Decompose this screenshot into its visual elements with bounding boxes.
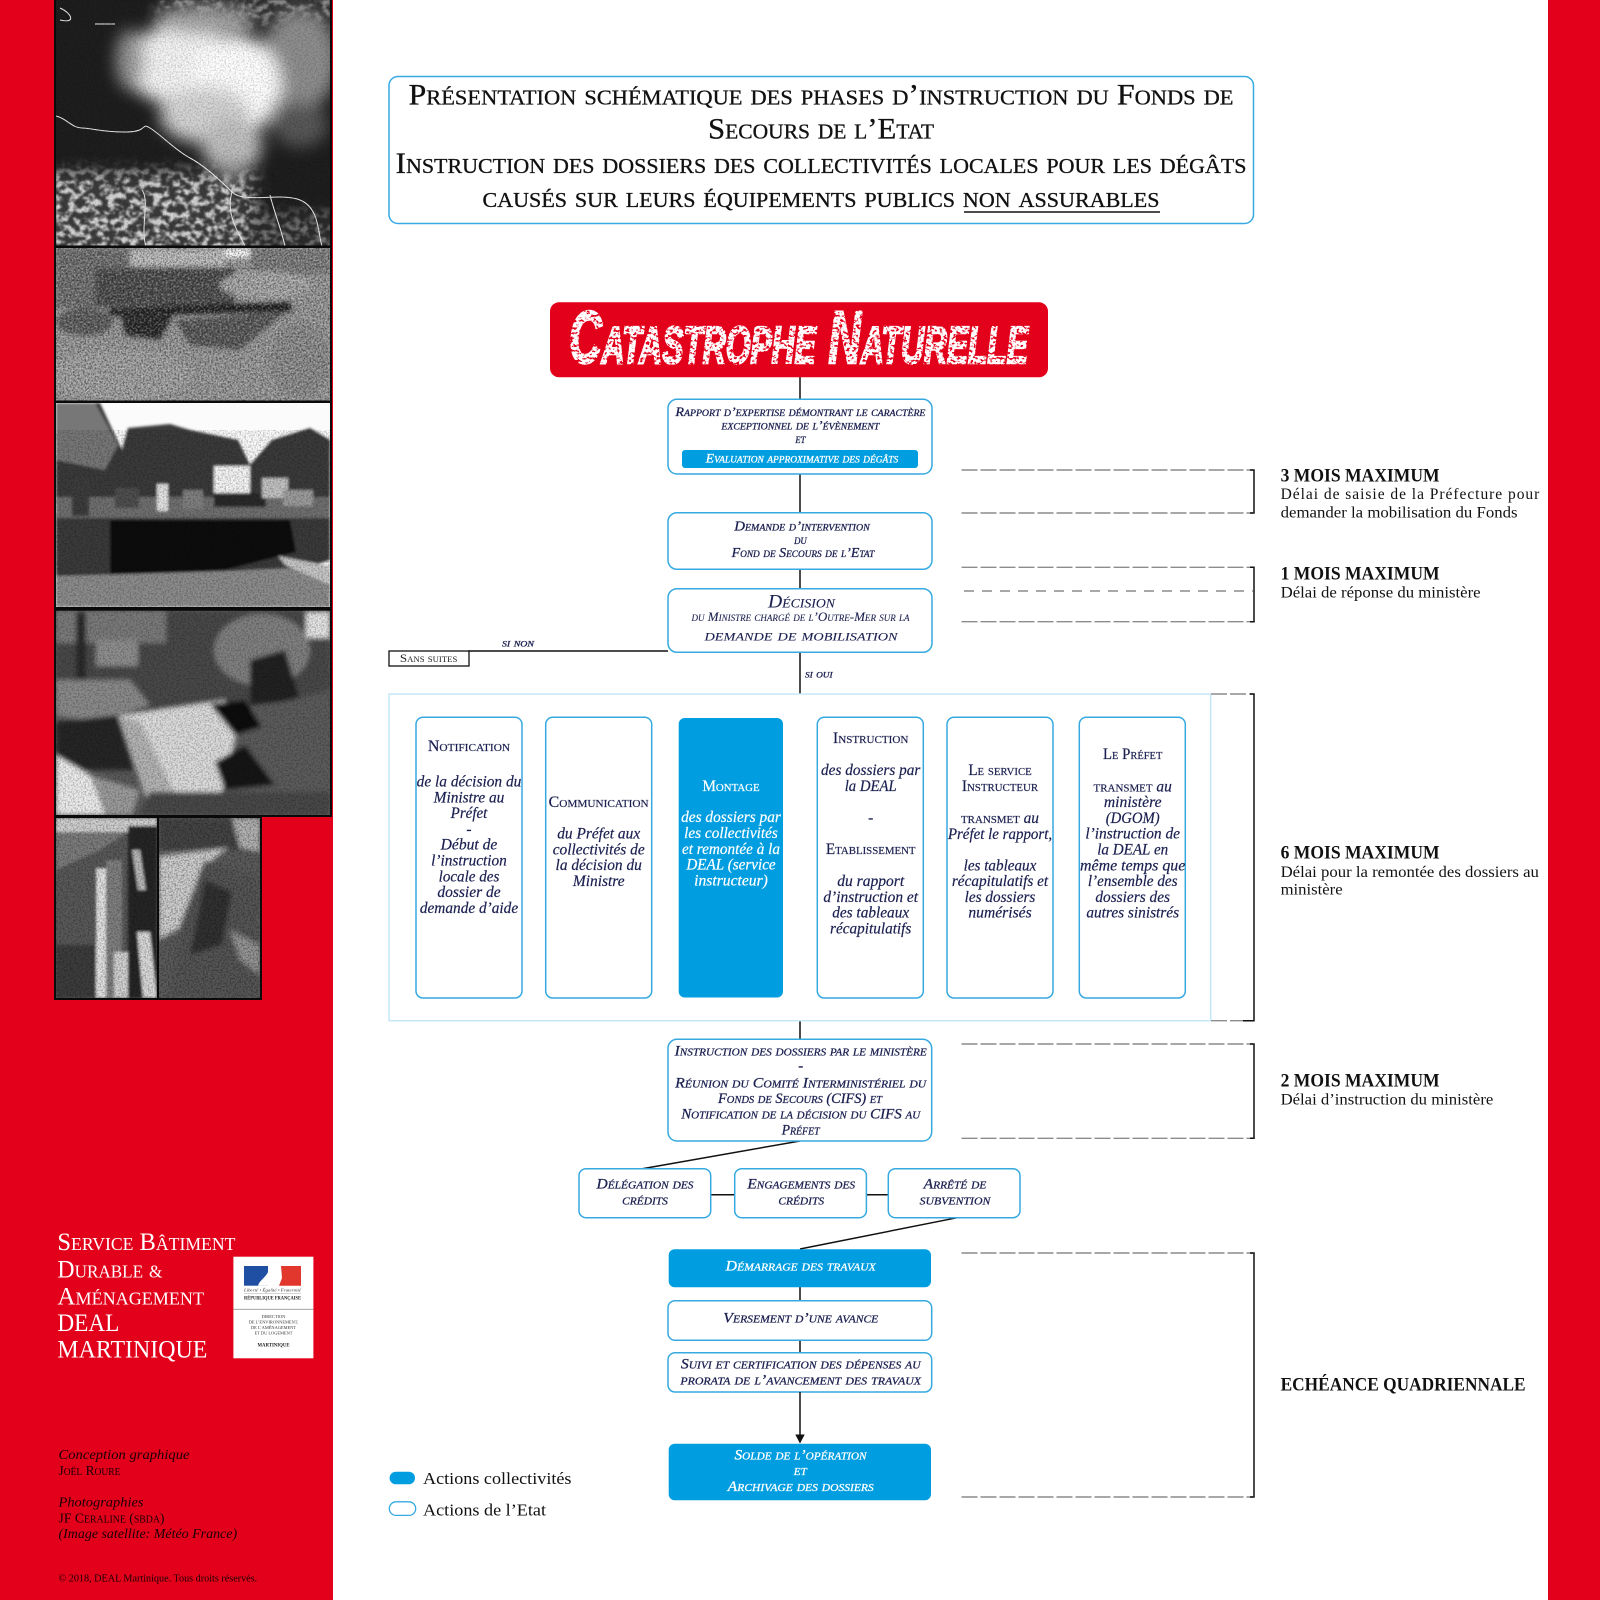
box: demande d'intervention: Fond de Secours de l’Etat <box>731 545 875 560</box>
card: montage: et remontée à la <box>682 841 780 858</box>
card: service instructeur: Préfet le rapport, <box>947 826 1052 843</box>
card: communication: Communication <box>549 794 649 811</box>
card: instruction: - <box>868 809 873 826</box>
credits: Photographies <box>57 1496 144 1511</box>
service heading: Durable & <box>57 1256 162 1283</box>
card: service instructeur: les dossiers <box>965 889 1035 906</box>
bracket: 3 mois <box>962 470 1254 513</box>
box: versement d'une avance <box>668 1301 932 1340</box>
box: versement d'une avance: Versement d’une avance <box>723 1311 879 1327</box>
card: montage: des dossiers par <box>681 809 782 826</box>
box: engagements des crédits <box>735 1169 866 1218</box>
logo: République Française DEAL: ET DU LOGEMENT <box>255 1330 293 1336</box>
box: engagements des crédits: crédits <box>778 1193 825 1209</box>
credits: © 2018, DEAL Martinique. Tous droits réservés. <box>58 1573 257 1584</box>
box: instruction par le ministère: - <box>798 1059 803 1075</box>
box: délégation des crédits: crédits <box>622 1193 668 1209</box>
card: notification: demande d’aide <box>420 900 518 917</box>
service heading: DEAL <box>57 1310 119 1337</box>
box: rapport d'expertise: exceptionnel de l’évènement <box>720 418 880 433</box>
card: le préfet: transmet au <box>1094 778 1172 795</box>
label: si non: si non <box>502 638 535 650</box>
photo: satellite image of the cyclone <box>56 0 338 246</box>
card: communication: collectivités de <box>553 841 645 858</box>
note: 1 mois maximum: 1 MOIS MAXIMUM <box>1281 565 1440 585</box>
credits: Joël Roure <box>58 1464 120 1479</box>
logo: République Française DEAL: Liberté • Égalité • Fraternité <box>243 1288 302 1292</box>
box: démarrage des travaux <box>669 1249 931 1287</box>
note: 3 mois maximum: Délai de saisie de la Préfecture pour <box>1281 486 1540 503</box>
card: notification: Notification <box>428 738 510 755</box>
title box: Secours de l’Etat <box>708 112 934 145</box>
connector lines <box>468 377 957 1353</box>
card: service instructeur: Le service <box>968 762 1032 779</box>
logo: République Française DEAL: DIRECTION <box>262 1314 286 1319</box>
box: solde de l'opération: Solde de l’opération <box>734 1448 867 1464</box>
logo: République Française DEAL: DE L’AMÉNAGEMENT <box>251 1325 296 1330</box>
box: rapport d'expertise <box>668 399 932 474</box>
photo: collapsed hillside and house <box>50 248 330 401</box>
note: 6 mois maximum: 6 MOIS MAXIMUM <box>1281 844 1440 864</box>
card: notification: dossier de <box>437 884 501 901</box>
note: 6 mois maximum: Délai pour la remontée des dossiers au <box>1281 864 1539 881</box>
box: instruction par le ministère: Instruction des dossiers par le ministère <box>674 1044 927 1060</box>
logo: République Française DEAL: RÉPUBLIQUE FRANÇAISE <box>244 1294 301 1302</box>
box: suivi et certification: Suivi et certification des dépenses au <box>681 1357 922 1373</box>
note: 1 mois maximum <box>1281 565 1481 602</box>
photo column <box>50 0 338 1000</box>
title box: Présentation schématique des phases d’instruction du Fonds de <box>408 79 1234 112</box>
note: 3 mois maximum: 3 MOIS MAXIMUM <box>1281 467 1440 487</box>
box: décision du ministre: Décision <box>767 592 836 612</box>
card: service instructeur: récapitulatifs et <box>952 873 1049 890</box>
note: 3 mois maximum: demander la mobilisation du Fonds <box>1281 504 1518 522</box>
bracket: 6 mois <box>1211 694 1254 1021</box>
card: notification: l’instruction <box>431 852 507 869</box>
box: rapport d'expertise: Evaluation approximative des dégâts <box>705 450 899 465</box>
card: notification <box>416 717 522 998</box>
card: montage: Montage <box>702 778 760 795</box>
photo: road collapse with truck <box>56 403 330 607</box>
card: notification: de la décision du <box>417 773 522 790</box>
card: service instructeur: numérisés <box>968 904 1032 921</box>
box: arrêté de subvention: subvention <box>920 1193 991 1209</box>
card: service instructeur: les tableaux <box>964 857 1036 874</box>
banner: Catastrophe Naturelle: Catastrophe Naturelle <box>569 296 1029 379</box>
title box: causés sur leurs équipements publics non assurables <box>482 181 1160 214</box>
box: solde de l'opération <box>669 1444 931 1500</box>
card: communication <box>546 717 652 998</box>
legend: Actions de l’Etat <box>423 1500 546 1519</box>
bracket: 1 mois <box>962 567 1254 622</box>
box: délégation des crédits <box>579 1169 711 1218</box>
panel: right red band <box>1548 0 1600 1600</box>
bracket: 2 mois <box>962 1044 1254 1138</box>
photo: eroded bank beside a road <box>159 818 260 998</box>
label: si oui: si oui <box>805 668 833 680</box>
card: instruction <box>817 717 923 998</box>
card: service instructeur <box>947 717 1053 998</box>
box: solde de l'opération: Archivage des dossiers <box>727 1479 874 1495</box>
box: instruction par le ministère: Notification de la décision du CIFS au <box>680 1107 921 1123</box>
box: demande d'intervention: Demande d’intervention <box>733 518 871 534</box>
arrow: vers le solde <box>795 1392 805 1444</box>
box: suivi et certification: prorata de l’avancement des travaux <box>679 1372 922 1388</box>
title box <box>389 76 1254 224</box>
box: délégation des crédits: Délégation des <box>595 1177 694 1193</box>
card: instruction: la DEAL <box>845 778 897 795</box>
logo: République Française DEAL <box>233 1257 313 1358</box>
credits: Conception graphique <box>58 1448 190 1463</box>
banner: Catastrophe Naturelle <box>550 296 1048 379</box>
card: service instructeur: Instructeur <box>962 778 1039 795</box>
box: sans suites: Sans suites <box>400 651 457 665</box>
card: le préfet <box>1079 717 1185 998</box>
box: instruction par le ministère <box>668 1039 932 1141</box>
note: 6 mois maximum <box>1281 844 1539 899</box>
service heading: MARTINIQUE <box>57 1337 207 1364</box>
card: le préfet: dossiers des <box>1095 889 1170 906</box>
card: communication: la décision du <box>556 857 642 874</box>
card: notification: Préfet <box>450 805 488 822</box>
card: instruction: des dossiers par <box>821 762 921 779</box>
legend <box>389 1469 572 1519</box>
box: demande d'intervention: du <box>793 532 807 547</box>
panel: left red sidebar <box>0 0 333 1600</box>
card: instruction: Instruction <box>833 730 908 747</box>
card: le préfet: l’ensemble des <box>1088 873 1178 890</box>
box: instruction par le ministère: Réunion du Comité Interministériel du <box>674 1075 927 1091</box>
note: 3 mois maximum <box>1281 467 1540 522</box>
card: instruction: du rapport <box>837 873 905 890</box>
card: le préfet: la DEAL en <box>1097 841 1168 858</box>
box: demande d'intervention <box>668 513 932 569</box>
card: service instructeur: transmet au <box>961 810 1039 827</box>
card: le préfet: (DGOM) <box>1106 810 1160 827</box>
box: engagements des crédits: Engagements des <box>746 1177 856 1193</box>
card: notification: - <box>466 821 472 838</box>
card: notification: locale des <box>439 868 499 885</box>
note: 6 mois maximum: ministère <box>1281 882 1343 899</box>
card: montage: DEAL (service <box>685 856 776 873</box>
credits: JF Ceraline (sbda) <box>58 1511 165 1526</box>
bracket: échéance quadriennale <box>962 1253 1254 1497</box>
box: instruction par le ministère: Préfet <box>781 1123 820 1139</box>
card: le préfet: autres sinistrés <box>1086 904 1179 921</box>
card: instruction: des tableaux <box>832 904 909 921</box>
box: décision du ministre: du Ministre chargé de l’Outre-Mer sur la <box>690 609 910 624</box>
service heading <box>57 1229 235 1364</box>
card: communication: Ministre <box>572 873 625 890</box>
service heading: Aménagement <box>57 1283 204 1310</box>
box: rapport d'expertise: Rapport d’expertise démontrant le caractère <box>674 404 926 419</box>
box: solde de l'opération: et <box>793 1463 808 1479</box>
legend: Actions collectivités <box>423 1469 572 1488</box>
card: montage <box>679 718 783 998</box>
title box: Instruction des dossiers des collectivités locales pour les dégâts <box>396 147 1246 180</box>
box: arrêté de subvention: Arrêté de <box>923 1177 987 1193</box>
note: 2 mois maximum: Délai d’instruction du ministère <box>1281 1092 1493 1108</box>
card: montage: les collectivités <box>684 825 778 842</box>
note: 2 mois maximum <box>1281 1071 1493 1108</box>
logo: République Française DEAL: DE L’ENVIRONNEMENT, <box>249 1320 298 1326</box>
photo: torrent cutting the road <box>56 611 330 815</box>
photo: damaged seaside road barrier <box>56 818 157 998</box>
card: notification: Début de <box>440 837 497 854</box>
panel: phases locales <box>389 694 1211 1021</box>
note: 1 mois maximum: Délai de réponse du ministère <box>1281 584 1481 602</box>
box: démarrage des travaux: Démarrage des travaux <box>725 1259 877 1275</box>
card: communication: du Préfet aux <box>557 825 640 842</box>
box: instruction par le ministère: Fonds de Secours (CIFS) et <box>717 1091 883 1107</box>
box: décision du ministre: demande de mobilisation <box>703 626 899 645</box>
service heading: Service Bâtiment <box>57 1229 235 1256</box>
box: arrêté de subvention <box>888 1169 1020 1218</box>
card: notification: Ministre au <box>433 789 505 806</box>
card: le préfet: l’instruction de <box>1085 826 1180 843</box>
card: montage: instructeur) <box>694 872 768 889</box>
credits <box>57 1448 257 1584</box>
note: échéance quadriennale: ECHÉANCE QUADRIENNALE <box>1281 1374 1526 1396</box>
box: rapport d'expertise: et <box>794 431 806 446</box>
card: instruction: Etablissement <box>826 841 916 858</box>
box: sans suites <box>389 651 469 666</box>
card: instruction: d’instruction et <box>823 889 919 906</box>
card: le préfet: ministère <box>1104 794 1162 811</box>
logo: République Française DEAL: MARTINIQUE <box>257 1344 290 1348</box>
credits: (Image satellite: Météo France) <box>58 1527 237 1542</box>
card: le préfet: Le Préfet <box>1103 746 1163 763</box>
box: décision du ministre <box>668 589 932 652</box>
box: suivi et certification <box>668 1353 932 1392</box>
note: 2 mois maximum: 2 MOIS MAXIMUM <box>1281 1071 1440 1091</box>
card: instruction: récapitulatifs <box>830 920 911 937</box>
card: le préfet: même temps que <box>1080 857 1185 874</box>
